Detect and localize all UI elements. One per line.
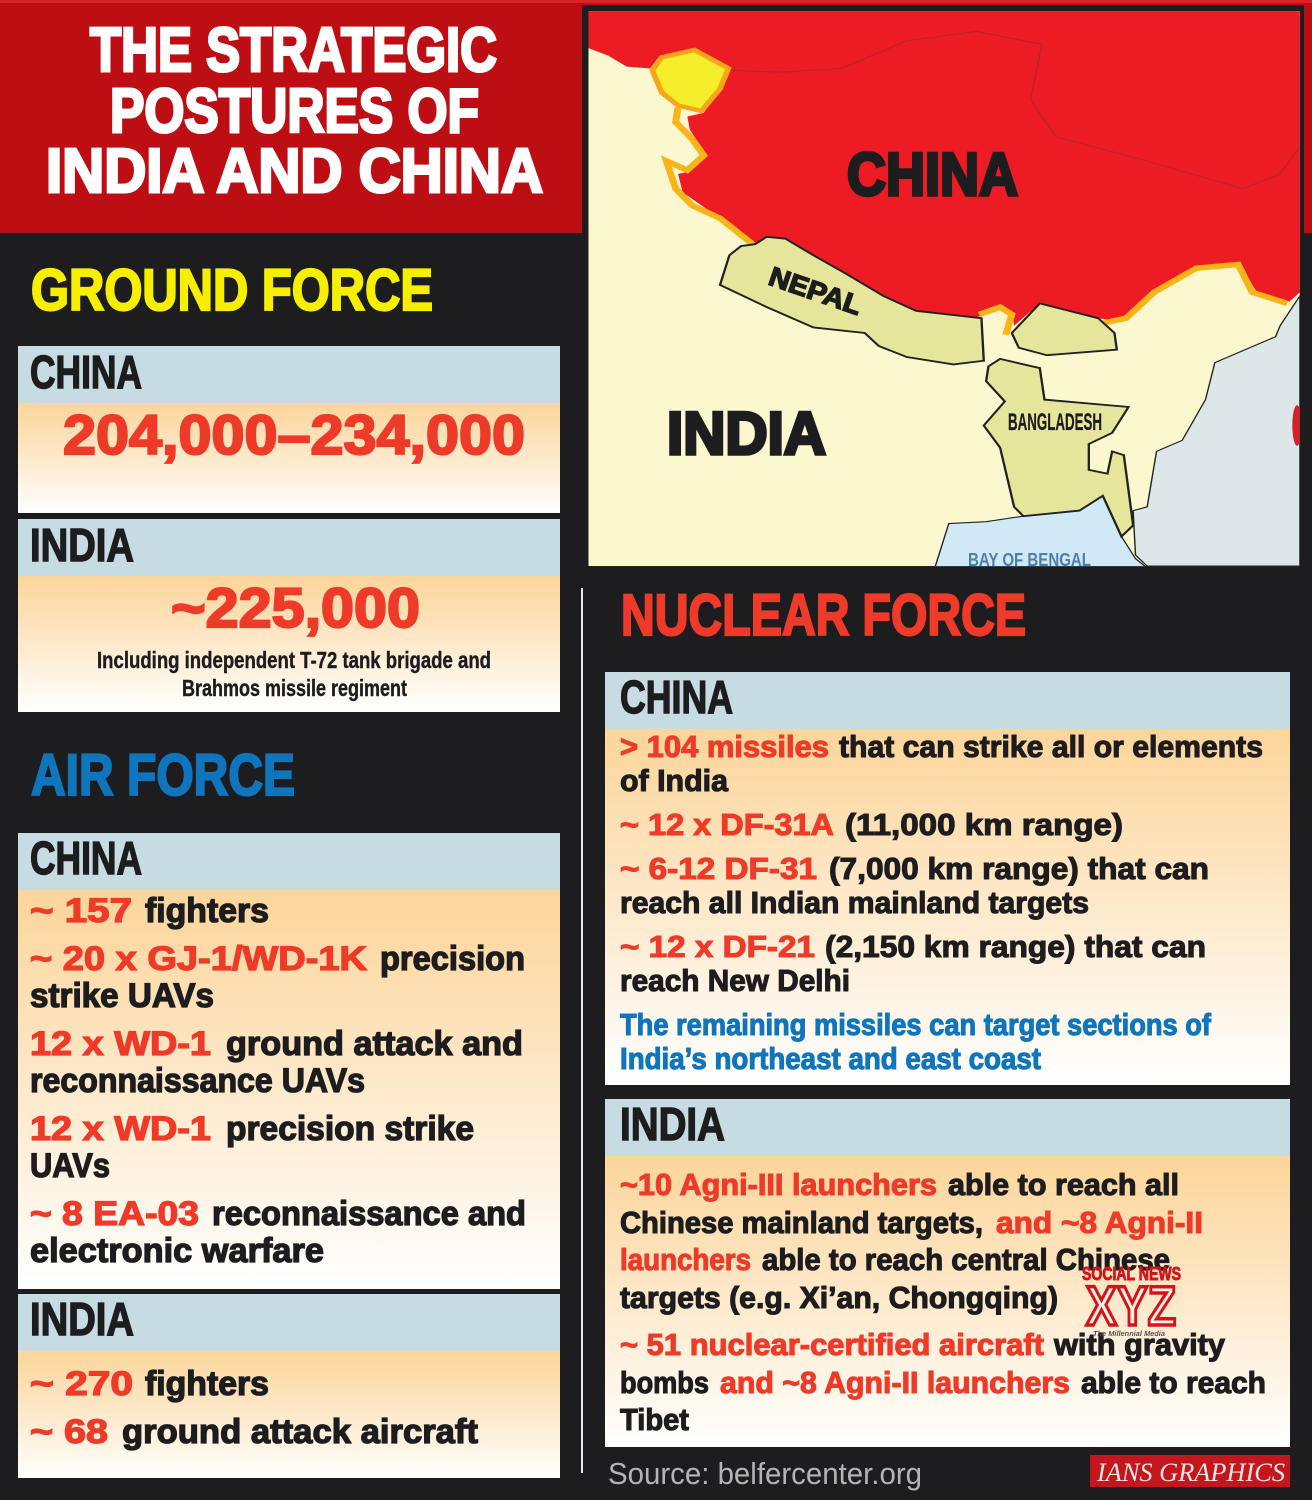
item: 104 missiles: of India bbox=[620, 763, 729, 798]
item: fighters: fighters bbox=[145, 1365, 269, 1403]
note: India ground force: Including independent T-72 tank brigade and bbox=[97, 647, 491, 673]
item: DF-21: (2,150 km range) that can bbox=[825, 929, 1206, 964]
title: THE STRATEGIC bbox=[90, 16, 497, 85]
item: WD-1 precision strike: precision strike bbox=[226, 1110, 474, 1148]
item: WD-1 precision strike bbox=[30, 1110, 474, 1185]
item: WD-1 precision strike: UAVs bbox=[30, 1147, 110, 1185]
item: nuclear-certified aircraft: with gravity bbox=[1053, 1327, 1226, 1362]
item: DF-31A: ~ 12 x DF-31A bbox=[620, 807, 834, 842]
item: fighters bbox=[30, 1365, 269, 1403]
item: precision strike UAVs bbox=[30, 940, 525, 1015]
number: India ground force: ~225,000 bbox=[171, 576, 420, 639]
panel: air force India bbox=[18, 1293, 560, 1478]
heading: nuclear force: NUCLEAR FORCE bbox=[621, 583, 1026, 648]
map: Bangladesh bbox=[984, 359, 1133, 536]
title: POSTURES OF bbox=[110, 77, 479, 146]
item: DF-31A: (11,000 km range) bbox=[845, 807, 1123, 842]
item: DF-31: reach all Indian mainland targets bbox=[620, 885, 1089, 920]
item: ground attack aircraft: ground attack aircraft bbox=[122, 1413, 478, 1451]
item: DF-21 bbox=[620, 929, 1206, 998]
item: ground attack UAVs: 12 x WD-1 bbox=[30, 1025, 211, 1063]
credit: IANS Graphics: IANS GRAPHICS bbox=[1096, 1458, 1285, 1487]
title: INDIA AND CHINA bbox=[46, 137, 543, 206]
label: China: CHINA bbox=[30, 832, 142, 884]
item: ground attack UAVs: reconnaissance UAVs bbox=[30, 1062, 365, 1100]
label: India: INDIA bbox=[30, 519, 134, 571]
map: disputed area bbox=[652, 50, 728, 111]
item: Agni launchers: able to reach all bbox=[948, 1167, 1179, 1202]
item: precision strike UAVs: strike UAVs bbox=[30, 977, 214, 1015]
item: Agni launchers: and ~8 Agni-II bbox=[996, 1205, 1203, 1240]
item: fighters bbox=[30, 892, 269, 930]
item: EA-03: electronic warfare bbox=[30, 1232, 324, 1270]
panel: nuclear force India bbox=[605, 1098, 1290, 1447]
item: nuclear-certified aircraft: bombs bbox=[620, 1365, 709, 1400]
item: 104 missiles: that can strike all or elements bbox=[839, 729, 1263, 764]
item: DF-31 bbox=[620, 851, 1209, 920]
label: India: INDIA bbox=[620, 1098, 725, 1150]
heading: air force: AIR FORCE bbox=[31, 743, 295, 808]
item: DF-31: (7,000 km range) that can bbox=[829, 851, 1209, 886]
map: China territory bbox=[588, 11, 1300, 326]
item: nuclear-certified aircraft: ~ 51 nuclear-certified aircraft bbox=[620, 1327, 1044, 1362]
item: EA-03 bbox=[30, 1195, 526, 1270]
item: Agni launchers: Chinese mainland targets, bbox=[620, 1205, 983, 1240]
item: Agni launchers: launchers bbox=[620, 1242, 751, 1277]
map label: Bangladesh: BANGLADESH bbox=[1008, 409, 1102, 436]
item: Agni launchers: ~10 Agni-III launchers bbox=[620, 1167, 937, 1202]
panel: nuclear force China bbox=[605, 671, 1290, 1085]
heading: ground force: GROUND FORCE bbox=[31, 258, 433, 323]
item: Agni launchers bbox=[620, 1167, 1203, 1315]
map: Nepal bbox=[720, 237, 984, 364]
note: remaining missiles: The remaining missiles can target sections of bbox=[620, 1007, 1212, 1042]
item: nuclear-certified aircraft bbox=[620, 1327, 1266, 1437]
item: DF-31A bbox=[620, 807, 1123, 842]
item: EA-03: ~ 8 EA-03 bbox=[30, 1195, 199, 1233]
title bbox=[46, 16, 543, 206]
number: China ground force: 204,000–234,000 bbox=[63, 403, 525, 466]
note: remaining missiles bbox=[620, 1007, 1212, 1076]
watermark: Social News XYZ: SOCIAL NEWS bbox=[1082, 1264, 1181, 1284]
item: precision strike UAVs: ~ 20 x GJ-1/WD-1K bbox=[30, 940, 367, 978]
item: WD-1 precision strike: 12 x WD-1 bbox=[30, 1110, 211, 1148]
panel: ground force China bbox=[18, 346, 560, 513]
note: remaining missiles: India’s northeast and east coast bbox=[620, 1041, 1041, 1076]
map: Bhutan bbox=[1012, 303, 1117, 355]
item: precision strike UAVs: precision bbox=[380, 940, 525, 978]
item: EA-03: reconnaissance and bbox=[212, 1195, 526, 1233]
map label: Nepal: NEPAL bbox=[765, 261, 866, 321]
map: sea and neighbouring land bbox=[935, 296, 1300, 568]
item: ground attack UAVs bbox=[30, 1025, 523, 1100]
item: Agni launchers: able to reach central Chinese bbox=[762, 1242, 1170, 1277]
item: nuclear-certified aircraft: able to reach bbox=[1081, 1365, 1266, 1400]
watermark: Social News XYZ: XYZ bbox=[1086, 1274, 1176, 1337]
item: nuclear-certified aircraft: Tibet bbox=[620, 1402, 689, 1437]
item: ground attack UAVs: ground attack and bbox=[226, 1025, 523, 1063]
item: nuclear-certified aircraft: and ~8 Agni-II launchers bbox=[720, 1365, 1070, 1400]
title banner bbox=[0, 0, 1312, 233]
map: contested border bbox=[666, 107, 1287, 335]
item: ground attack aircraft: ~ 68 bbox=[30, 1413, 108, 1451]
label: India: INDIA bbox=[30, 1293, 134, 1345]
item: fighters: ~ 157 bbox=[30, 892, 132, 930]
map label: Bay of Bengal: BAY OF BENGAL bbox=[968, 550, 1091, 570]
item: fighters: ~ 270 bbox=[30, 1365, 133, 1403]
panel: ground force India bbox=[18, 519, 560, 712]
source: Source: belfercenter.org bbox=[608, 1456, 922, 1491]
note: India ground force: Brahmos missile regiment bbox=[182, 675, 407, 701]
map label: India: INDIA bbox=[667, 400, 826, 467]
item: 104 missiles bbox=[620, 729, 1263, 798]
item: DF-31: ~ 6-12 DF-31 bbox=[620, 851, 817, 886]
label: China: CHINA bbox=[620, 671, 733, 723]
item: DF-21: ~ 12 x DF-21 bbox=[620, 929, 815, 964]
note: India ground force bbox=[97, 647, 491, 701]
item: fighters: fighters bbox=[145, 892, 269, 930]
label: China: CHINA bbox=[30, 346, 142, 398]
item: Agni launchers: targets (e.g. Xi’an, Chongqing) bbox=[620, 1280, 1058, 1315]
panel: air force China bbox=[18, 832, 560, 1289]
item: 104 missiles: > 104 missiles bbox=[620, 729, 829, 764]
map panel bbox=[582, 5, 1304, 572]
watermark: Social News XYZ: The Millennial Media bbox=[1093, 1331, 1165, 1338]
item: DF-21: reach New Delhi bbox=[620, 963, 850, 998]
map label: China: CHINA bbox=[847, 141, 1018, 208]
